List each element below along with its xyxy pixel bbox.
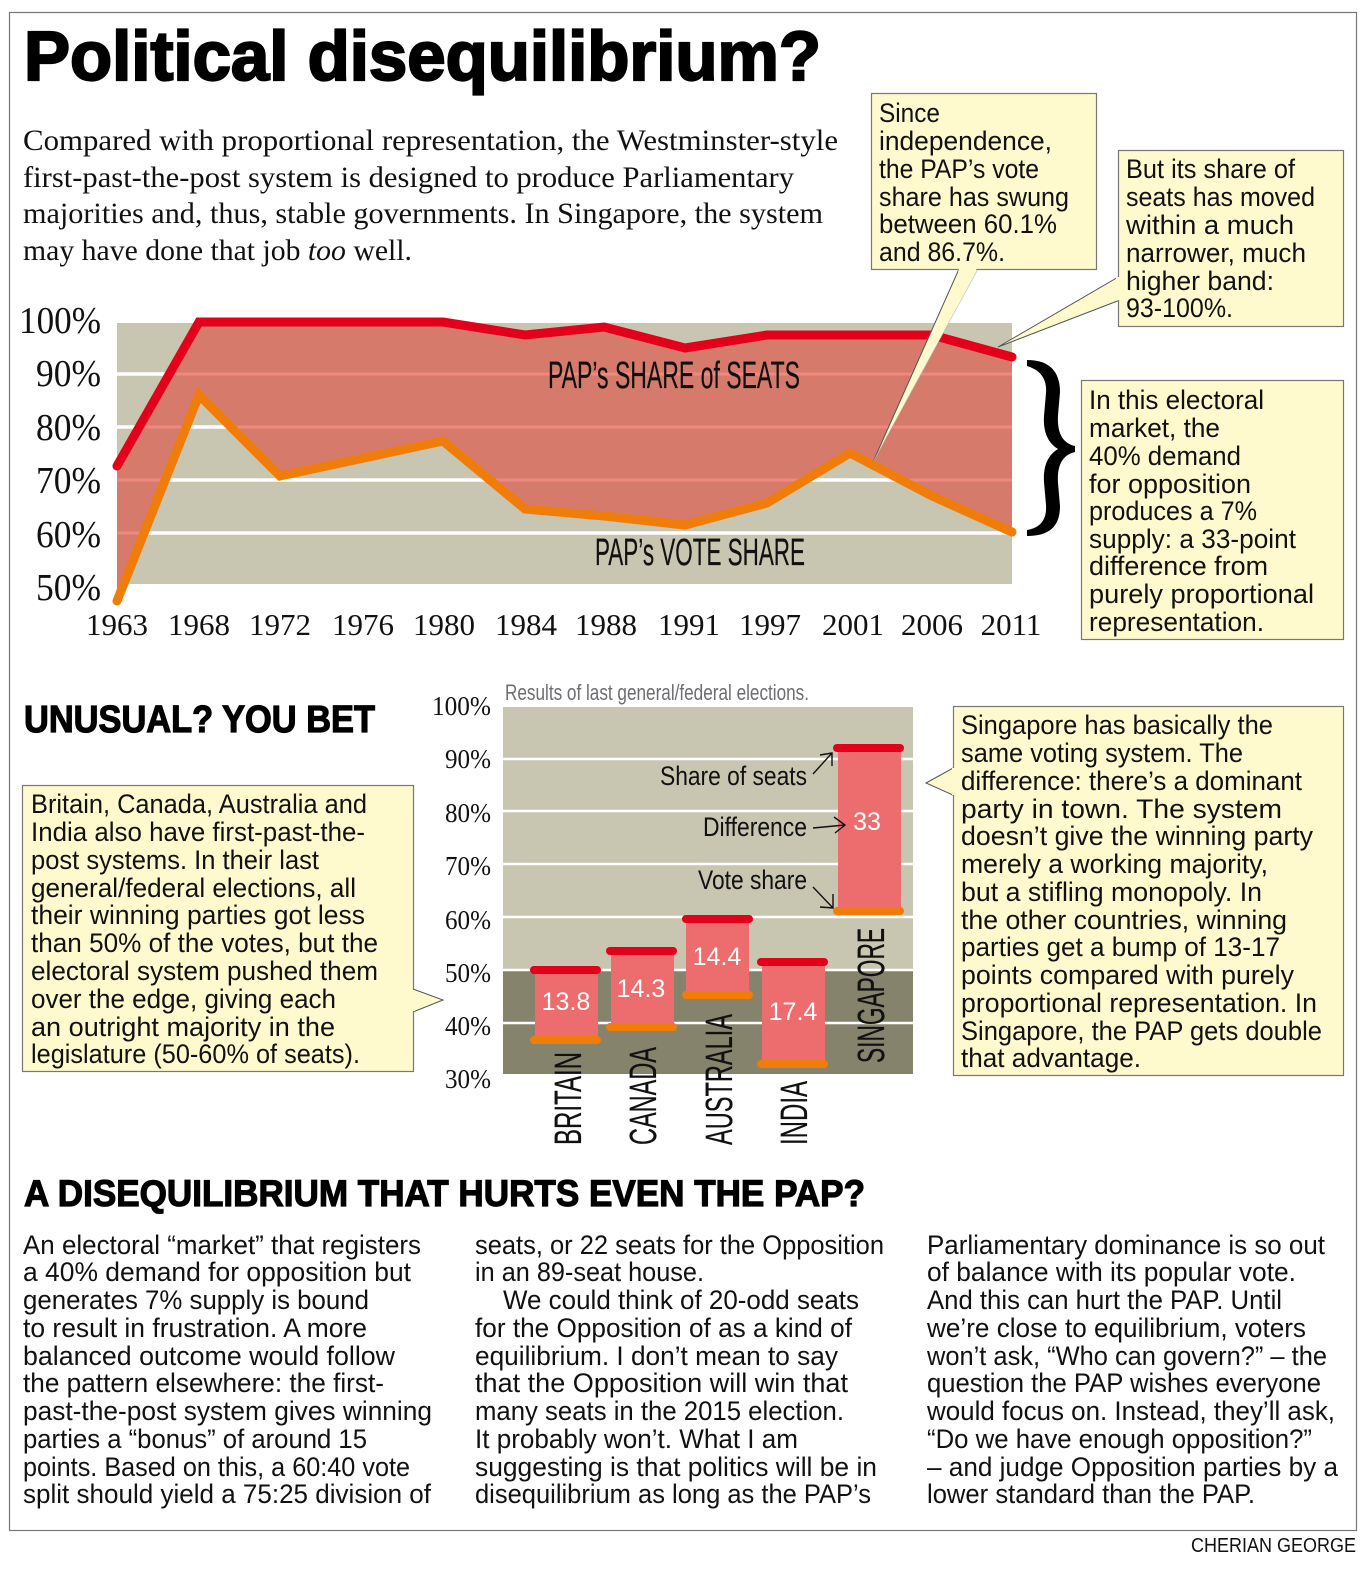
callout: electoral market: difference from — [1089, 551, 1268, 581]
y axis labels: 90% — [36, 353, 101, 395]
annotation: vote share — [698, 865, 833, 908]
article column 1: balanced outcome would follow — [23, 1341, 396, 1371]
bar: Australia: 14.4 — [693, 943, 741, 971]
x axis labels: 1976 — [332, 607, 394, 642]
line chart: PAP seats vs votes — [19, 300, 1041, 642]
callout: seat share band: seats has moved — [1126, 182, 1315, 212]
x axis labels: 1980 — [413, 607, 475, 642]
y axis labels: 40% — [445, 1011, 491, 1041]
heading: disequilibrium: A DISEQUILIBRIUM THAT HURTS EVEN THE PAP? — [24, 1173, 865, 1214]
callout: Singapore difference: proportional representation. In — [961, 988, 1317, 1018]
y axis labels: 80% — [445, 798, 491, 828]
heading: unusual: UNUSUAL? YOU BET — [24, 699, 375, 741]
x axis labels: 2006 — [901, 607, 963, 642]
callout: other countries: general/federal elections, all — [31, 873, 356, 903]
label: votes: PAP’s VOTE SHARE — [595, 532, 805, 574]
vote share line — [117, 395, 1012, 601]
article column 1: An electoral “market” that registers — [23, 1230, 421, 1260]
article column 2: seats, or 22 seats for the Opposition — [475, 1230, 884, 1260]
callout: vote share swing: the PAP’s vote — [879, 154, 1039, 184]
callout: Singapore difference: but a stifling monopoly. In — [961, 877, 1262, 907]
article column 3 — [926, 1230, 1338, 1509]
bar: India — [757, 958, 828, 1145]
callout: seat share band: within a much — [1125, 210, 1294, 240]
title: Political disequilibrium? — [24, 17, 821, 95]
callout: electoral market: In this electoral — [1089, 385, 1264, 415]
callout: Singapore difference: points compared with purely — [961, 960, 1295, 990]
bar: India: 17.4 — [769, 998, 817, 1026]
article column 1: a 40% demand for opposition but — [23, 1257, 412, 1287]
x axis labels: 1988 — [575, 607, 637, 642]
x axis labels: 2001 — [822, 607, 884, 642]
callout: seat share band: 93-100%. — [1126, 293, 1233, 323]
bar: Singapore: SINGAPORE — [851, 928, 893, 1063]
callout: Singapore difference: Singapore, the PAP gets double — [961, 1016, 1322, 1046]
callout: other countries: Britain, Canada, Australia and — [31, 789, 367, 819]
callout: seat share band: higher band: — [1126, 266, 1274, 296]
y axis labels: 100% — [432, 691, 491, 721]
callout: other countries: electoral system pushed them — [31, 956, 378, 986]
article column 3: And this can hurt the PAP. Until — [927, 1285, 1282, 1315]
article column 3: lower standard than the PAP. — [927, 1479, 1255, 1509]
bar: Canada: CANADA — [623, 1047, 665, 1145]
callout: Singapore difference: parties get a bump of 13-17 — [961, 932, 1280, 962]
callout: vote share swing: between 60.1% — [879, 209, 1057, 239]
y axis labels: 70% — [445, 851, 491, 881]
callout: Singapore difference — [926, 706, 1344, 1076]
article column 2: in an 89-seat house. — [475, 1257, 704, 1287]
y axis labels: 60% — [445, 905, 491, 935]
x axis labels: 2011 — [981, 607, 1041, 642]
article column 1: generates 7% supply is bound — [23, 1285, 369, 1315]
article column 3: Parliamentary dominance is so out — [927, 1230, 1326, 1260]
callout: vote share swing: independence, — [879, 126, 1052, 156]
article column 2: disequilibrium as long as the PAP’s — [475, 1479, 871, 1509]
x axis labels: 1984 — [495, 607, 558, 642]
x axis labels: 1972 — [249, 607, 311, 642]
callout: Singapore difference: party in town. The system — [961, 794, 1282, 824]
intro text: may have done that job too well. — [23, 234, 412, 267]
article column 2: suggesting is that politics will be in — [475, 1452, 877, 1482]
curly brace — [1027, 360, 1075, 536]
callout: seat share band: But its share of — [1126, 154, 1296, 184]
bar: Singapore — [833, 744, 904, 1063]
callout: electoral market: produces a 7% — [1089, 496, 1257, 526]
chart background — [503, 707, 913, 970]
y axis labels: 50% — [36, 567, 101, 609]
intro text — [23, 124, 838, 267]
y axis labels — [19, 300, 101, 609]
article column 1: past-the-post system gives winning — [23, 1396, 432, 1426]
article column 2 — [475, 1230, 884, 1509]
article column 3: “Do we have enough opposition?” — [927, 1424, 1312, 1454]
bar: Britain: 13.8 — [542, 988, 590, 1016]
callout: electoral market: for opposition — [1089, 469, 1251, 499]
article column 1 — [23, 1230, 432, 1509]
chart note: Results of last general/federal elections. — [505, 680, 809, 705]
annotation: vote share: Vote share — [698, 865, 807, 895]
callout: Singapore difference: the other countries, winning — [961, 905, 1287, 935]
callout: Singapore difference: merely a working majority, — [961, 849, 1268, 879]
article column 1: to result in frustration. A more — [23, 1313, 367, 1343]
article column 3: of balance with its popular vote. — [927, 1257, 1296, 1287]
callout: electoral market: supply: a 33-point — [1089, 524, 1297, 554]
intro text: Compared with proportional representation, the Westminster-style — [23, 124, 838, 157]
callout: other countries: post systems. In their last — [31, 845, 320, 875]
article column 3: would focus on. Instead, they’ll ask, — [926, 1396, 1335, 1426]
credit: CHERIAN GEORGE — [1191, 1535, 1356, 1557]
article column 3: won’t ask, “Who can govern?” – the — [926, 1341, 1327, 1371]
callout: electoral market: 40% demand — [1089, 441, 1241, 471]
bar chart: last elections — [432, 680, 913, 1145]
callout: Singapore difference: Singapore has basically the — [961, 710, 1273, 740]
callout: vote share swing — [872, 94, 1096, 462]
intro text: first-past-the-post system is designed to produce Parliamentary — [23, 161, 794, 194]
bar: Australia — [682, 915, 753, 1145]
callout: electoral market: representation. — [1089, 607, 1264, 637]
annotation: share of seats: Share of seats — [660, 761, 807, 791]
y axis labels — [432, 691, 491, 1094]
article column 1: parties a “bonus” of around 15 — [23, 1424, 367, 1454]
article column 3: – and judge Opposition parties by a — [927, 1452, 1338, 1482]
callout: other countries — [22, 786, 443, 1072]
bar: Singapore: 33 — [853, 808, 881, 836]
article column 2: many seats in the 2015 election. — [475, 1396, 844, 1426]
callout: other countries: than 50% of the votes, but the — [31, 928, 378, 958]
callout: Singapore difference: doesn’t give the winning party — [961, 821, 1314, 851]
bar: Britain: BRITAIN — [548, 1052, 590, 1145]
callout: other countries: an outright majority in the — [31, 1012, 335, 1042]
callout: Singapore difference: that advantage. — [961, 1043, 1141, 1073]
seat share line — [117, 322, 1012, 466]
callout: other countries: their winning parties got less — [31, 900, 365, 930]
y axis labels: 30% — [445, 1064, 491, 1094]
callout: Singapore difference: difference: there’s a dominant — [961, 766, 1303, 796]
bar: Canada: 14.3 — [617, 975, 665, 1003]
bar: Australia: AUSTRALIA — [699, 1014, 741, 1145]
annotation: difference: Difference — [703, 812, 807, 842]
article column 2: It probably won’t. What I am — [475, 1424, 798, 1454]
article column 2: equilibrium. I don’t mean to say — [475, 1341, 839, 1371]
article column 3: we’re close to equilibrium, voters — [926, 1313, 1306, 1343]
callout: other countries: India also have first-past-the- — [31, 817, 365, 847]
intro text: majorities and, thus, stable governments. In Singapore, the system — [23, 197, 823, 230]
bar: Britain — [530, 966, 601, 1145]
x axis labels: 1968 — [168, 607, 230, 642]
label: seats: PAP’s SHARE of SEATS — [548, 355, 800, 397]
callout: electoral market: market, the — [1089, 413, 1220, 443]
article column 1: points. Based on this, a 60:40 vote — [23, 1452, 410, 1482]
y axis labels: 60% — [36, 514, 101, 556]
callout: seat share band: narrower, much — [1126, 238, 1306, 268]
callout: vote share swing: Since — [879, 98, 940, 128]
callout: vote share swing: and 86.7%. — [879, 237, 1005, 267]
article column 1: the pattern elsewhere: the first- — [23, 1368, 384, 1398]
callout: vote share swing: share has swung — [879, 182, 1069, 212]
x axis labels: 1997 — [739, 607, 801, 642]
article column 2: that the Opposition will win that — [475, 1368, 849, 1398]
y axis labels: 50% — [445, 958, 491, 988]
chart background — [117, 323, 1012, 584]
y axis labels: 80% — [36, 407, 101, 449]
callout: seat share band — [998, 150, 1344, 347]
x axis labels: 1963 — [86, 607, 148, 642]
bar: Canada — [606, 947, 677, 1145]
callout: electoral market: purely proportional — [1089, 579, 1314, 609]
y axis labels: 90% — [445, 744, 491, 774]
article column 2: for the Opposition of as a kind of — [475, 1313, 853, 1343]
callout: other countries: legislature (50-60% of seats). — [31, 1039, 360, 1069]
article column 3: question the PAP wishes everyone — [927, 1368, 1321, 1398]
x axis labels: 1991 — [658, 607, 720, 642]
callout: electoral market — [1082, 380, 1344, 640]
callout: other countries: over the edge, giving each — [31, 984, 336, 1014]
article column 1: split should yield a 75:25 division of — [23, 1479, 432, 1509]
bar: India: INDIA — [774, 1081, 816, 1145]
y axis labels: 70% — [36, 460, 101, 502]
article column 2: We could think of 20-odd seats — [503, 1285, 859, 1315]
x axis labels — [86, 607, 1041, 642]
y axis labels: 100% — [19, 300, 101, 342]
gap area between seats and votes — [117, 322, 1012, 601]
callout: Singapore difference: same voting system. The — [961, 738, 1243, 768]
